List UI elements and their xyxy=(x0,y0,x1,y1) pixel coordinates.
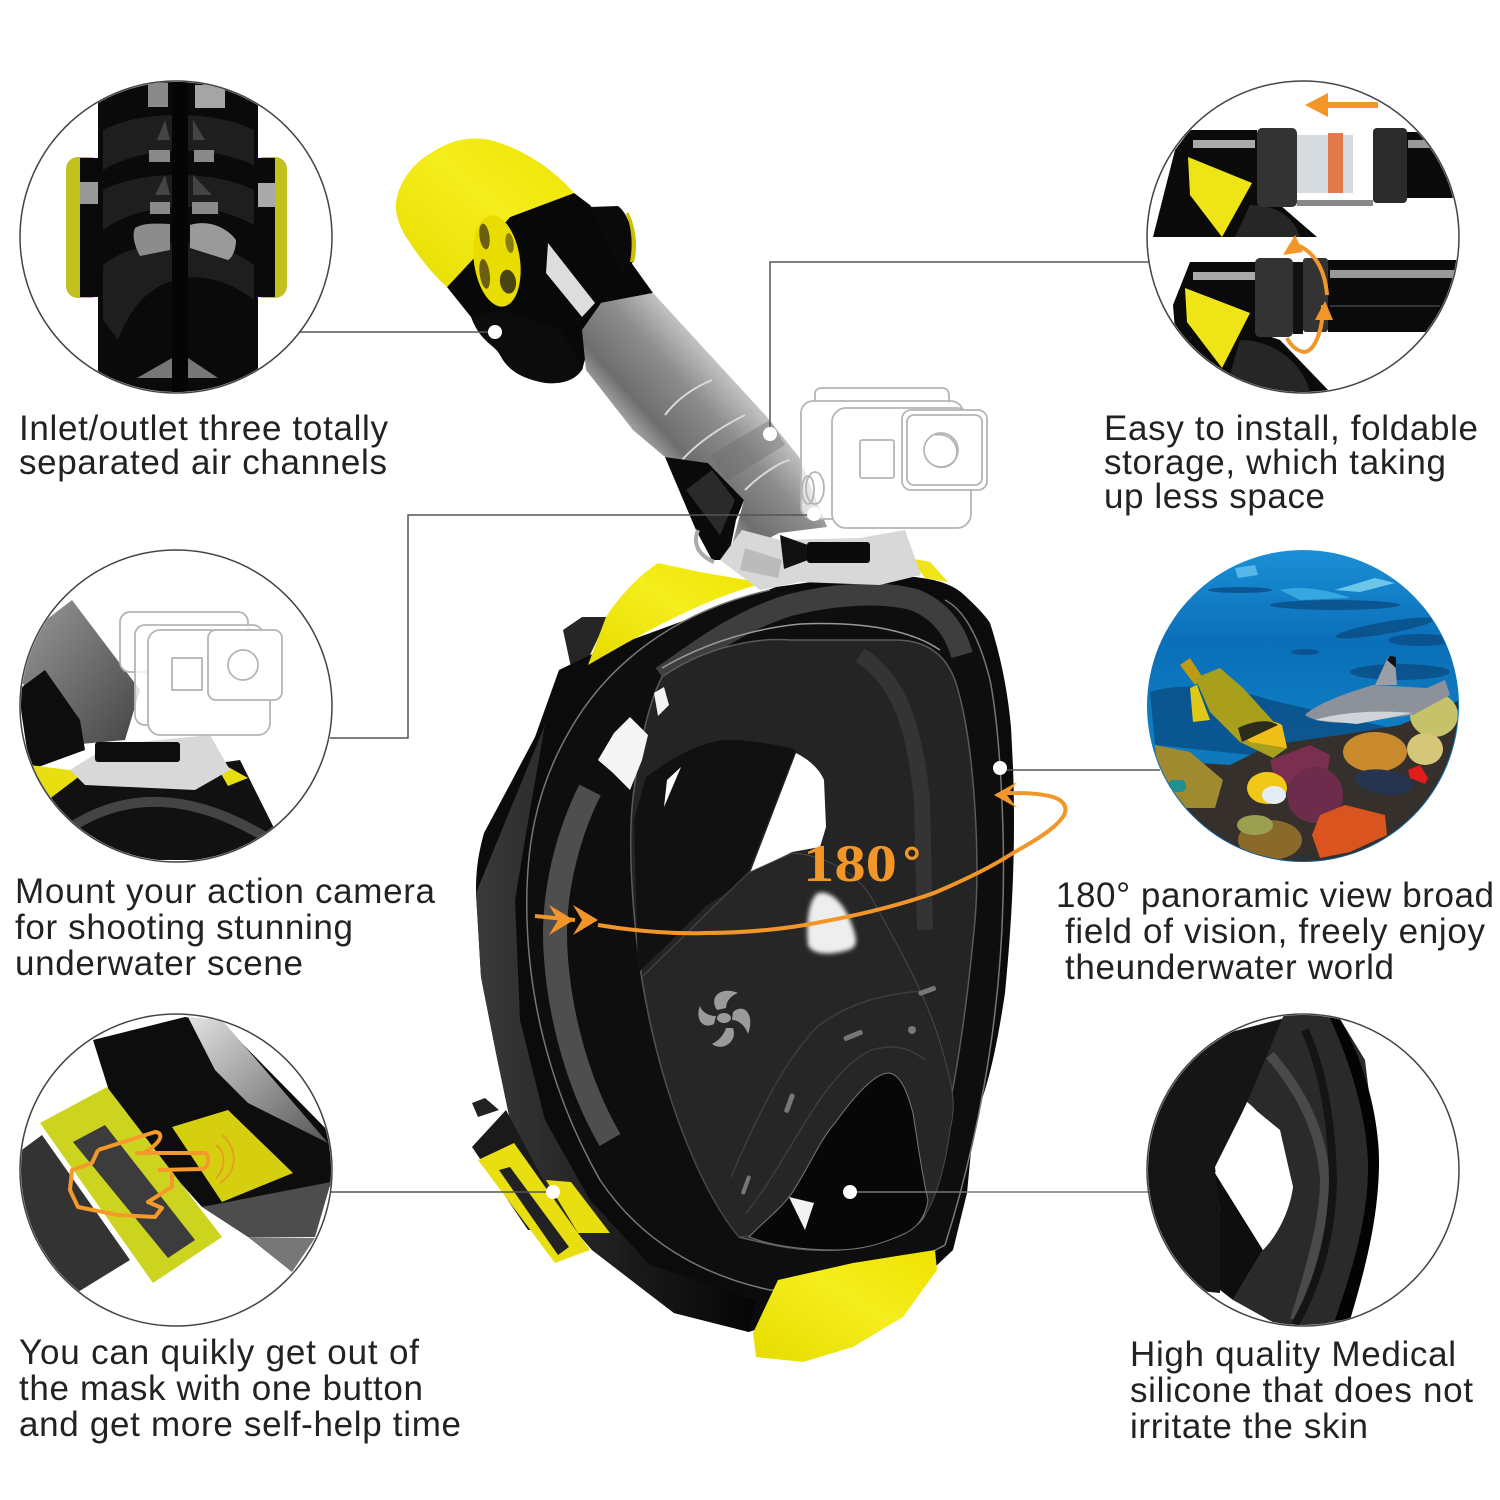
180 degree arc arrow xyxy=(535,782,1065,935)
panel: foldable tube photo xyxy=(1147,81,1462,393)
text: panoramic view: field of vision, freely enjoy xyxy=(1065,912,1486,951)
black outer edge xyxy=(1328,1014,1379,1320)
black tube base xyxy=(665,457,744,560)
fan logo xyxy=(698,991,750,1047)
tube highlight xyxy=(546,243,595,317)
yellow chin guard xyxy=(753,1250,937,1362)
reef floor xyxy=(1150,700,1460,870)
snorkel yellow cap xyxy=(396,139,574,287)
buckle slit xyxy=(73,1125,195,1258)
clear bracket xyxy=(720,530,921,590)
panel: silicone photo xyxy=(1140,1012,1459,1330)
text: camera mount: for shooting stunning xyxy=(15,908,353,947)
clear coupling xyxy=(1297,135,1353,193)
mask body xyxy=(476,577,1014,1332)
panel: underwater photo xyxy=(1147,550,1460,870)
main tube xyxy=(98,75,258,405)
cavities xyxy=(103,115,254,340)
round coral xyxy=(1407,733,1443,765)
orange sponge xyxy=(1312,805,1387,858)
buckle strap xyxy=(472,1110,570,1230)
text: silicone: irritate the skin xyxy=(1130,1407,1368,1446)
thumb screw xyxy=(780,535,808,569)
surface highlights xyxy=(1235,565,1258,578)
leader line: air channels xyxy=(300,331,495,333)
view window sliver xyxy=(664,767,681,807)
cream coral xyxy=(1410,693,1458,737)
mask band xyxy=(93,1017,340,1207)
camera xyxy=(120,612,282,735)
textured strap xyxy=(15,1135,130,1292)
glossy highlights xyxy=(137,83,225,378)
text: foldable storage xyxy=(1104,409,1478,516)
translucent tube section xyxy=(582,293,827,560)
lower coral xyxy=(1238,820,1302,860)
snorkel mask product xyxy=(396,139,1065,1362)
purple coral lower xyxy=(1287,767,1343,823)
text: foldable storage: storage, which taking xyxy=(1104,443,1446,482)
text: foldable storage: up less space xyxy=(1104,477,1325,516)
text: foldable storage: Easy to install, foldable xyxy=(1104,409,1478,448)
buckle slit xyxy=(499,1167,569,1255)
grey lower mask xyxy=(202,1182,331,1237)
lens reflection xyxy=(188,1017,328,1143)
slide arrow xyxy=(1327,102,1378,108)
small yellow fish xyxy=(1247,772,1287,804)
hand icon xyxy=(70,1132,208,1217)
chamber seam lines xyxy=(731,990,935,1213)
text: silicone: silicone that does not xyxy=(1130,1371,1473,1410)
chamber detail marks xyxy=(741,985,937,1195)
nose white glint xyxy=(789,1197,814,1230)
nose opening xyxy=(749,1073,928,1250)
release button xyxy=(546,1180,610,1233)
text: panoramic view: 180° panoramic view broad xyxy=(1056,876,1494,915)
view window xyxy=(750,753,826,873)
left rim grey band xyxy=(555,790,610,1140)
buckle frame xyxy=(478,1143,590,1263)
black upper tube xyxy=(447,193,653,380)
dark streaks xyxy=(1150,587,1452,760)
upper white reflection xyxy=(654,687,669,716)
side strap xyxy=(563,617,608,672)
snorkel valve xyxy=(468,212,526,310)
leader line: panoramic view xyxy=(1000,769,1160,771)
side knob xyxy=(590,206,634,275)
panel: action camera photo xyxy=(10,550,332,862)
rotate arrows xyxy=(1287,245,1327,352)
chamber white reflection xyxy=(807,893,856,953)
leader line: camera mount xyxy=(330,515,814,738)
left white reflection xyxy=(598,717,648,790)
text: camera mount: Mount your action camera xyxy=(15,872,436,911)
striped fish xyxy=(1168,780,1186,792)
skirt light ridge xyxy=(1270,1055,1325,1320)
inner right channel xyxy=(860,655,925,930)
red fish xyxy=(1408,765,1428,784)
tube rings xyxy=(665,380,790,490)
buckle frame xyxy=(40,1087,222,1283)
text: quick release xyxy=(19,1333,461,1444)
panel: air channels photo xyxy=(20,75,332,405)
yellow top-left corner xyxy=(588,563,764,665)
180 degree arc arrow: ° xyxy=(903,838,921,887)
centre spine xyxy=(172,82,188,392)
top row tube xyxy=(1153,130,1317,237)
silicone skirt xyxy=(1233,1012,1378,1330)
orange coral xyxy=(1343,732,1407,772)
text: camera mount: underwater scene xyxy=(15,944,303,983)
text: camera mount xyxy=(15,872,436,983)
outer left grey band xyxy=(476,725,755,1332)
leader line: silicone xyxy=(850,1191,1150,1193)
inner lens xyxy=(631,640,977,1250)
bottom row tube xyxy=(1173,262,1330,392)
180 degree arc arrow: 180 xyxy=(803,835,897,893)
air channel teeth xyxy=(471,310,583,383)
triggerfish xyxy=(1180,658,1287,758)
nose and breathing chamber xyxy=(642,853,953,1237)
text: quick release: You can quikly get out of xyxy=(19,1333,419,1372)
textured strap xyxy=(1140,1018,1285,1293)
left coral xyxy=(1155,745,1223,808)
text: air channels xyxy=(19,409,388,482)
purple coral xyxy=(1270,745,1330,784)
lens white edge line xyxy=(527,590,1003,1290)
side buckle xyxy=(472,1098,610,1263)
tube base strap loop xyxy=(696,530,714,562)
inner flap xyxy=(1215,1173,1263,1300)
leader line: quick release xyxy=(330,1191,553,1193)
shark xyxy=(1305,656,1450,724)
marker dots xyxy=(488,325,1007,1199)
leader line: foldable storage xyxy=(770,262,1150,434)
text: silicone xyxy=(1130,1335,1473,1446)
yellow top-right corner xyxy=(910,558,948,582)
mount xyxy=(70,735,230,790)
side wheels xyxy=(66,157,95,298)
text: air channels: Inlet/outlet three totally xyxy=(19,409,388,448)
head strap xyxy=(634,740,796,973)
action camera outline xyxy=(801,388,987,528)
top rim light line xyxy=(662,624,940,668)
dark fish xyxy=(1353,766,1415,798)
snorkel tube xyxy=(396,139,827,562)
clear valve bowls xyxy=(134,224,170,256)
mask top xyxy=(34,760,274,860)
buckle strap tab xyxy=(472,1098,499,1117)
face opening xyxy=(1215,1102,1293,1250)
skirt dark groove xyxy=(1295,1030,1333,1325)
tube xyxy=(20,600,140,745)
camera mount xyxy=(720,530,921,590)
press waves xyxy=(216,1135,234,1183)
text: quick release: the mask with one button xyxy=(19,1369,423,1408)
text: air channels: separated air channels xyxy=(19,443,387,482)
release button xyxy=(172,1110,293,1202)
top rim xyxy=(662,595,962,677)
text: quick release: and get more self-help time xyxy=(19,1405,461,1444)
panel: quick release buckle photo xyxy=(15,1014,340,1326)
text: silicone: High quality Medical xyxy=(1130,1335,1456,1374)
text: panoramic view xyxy=(1056,876,1494,987)
text: panoramic view: theunderwater world xyxy=(1065,948,1394,987)
